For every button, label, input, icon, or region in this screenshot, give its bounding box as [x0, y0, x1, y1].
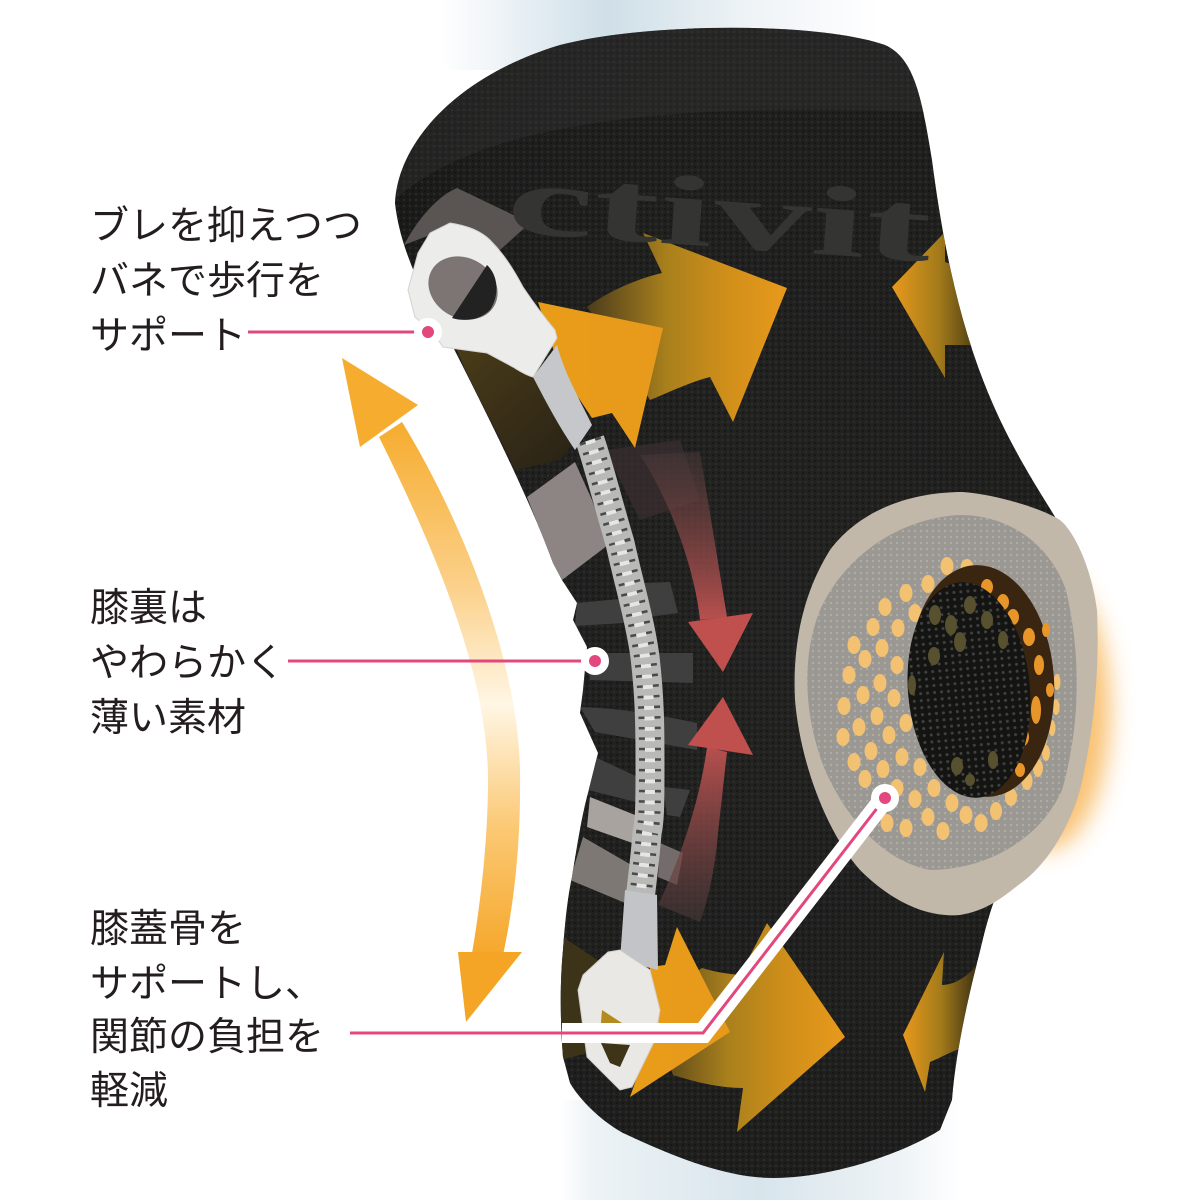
callout: top text: サポート: [90, 315, 246, 358]
lower hinge plate: [578, 950, 660, 1090]
callout: top text: [90, 205, 362, 358]
callout: bottom text: サポートし、: [90, 963, 324, 1006]
upper hinge plate: [408, 223, 557, 377]
orange arrow: upper right: [892, 234, 971, 378]
sleeve top band shading: [395, 23, 940, 200]
pad outer shell: [795, 492, 1098, 915]
motion double arrow: [342, 358, 522, 1022]
red arrow up: [658, 697, 753, 922]
patella pad: [795, 492, 1098, 915]
callout: middle text: 薄い素材: [90, 697, 246, 740]
dark grey stripes: [575, 599, 624, 626]
patella opening: [902, 560, 1062, 802]
orange arrow: upper large: [587, 233, 787, 422]
red arrow down: [640, 452, 753, 672]
knit lettering: ctivit: [503, 143, 935, 284]
pad inner: [807, 515, 1077, 870]
side stay spring: [533, 345, 658, 970]
pad light dots: [836, 557, 1060, 840]
hinge opening: [417, 244, 509, 332]
callout: middle text: [90, 587, 285, 740]
callout: bottom text: 膝蓋骨を: [90, 908, 246, 951]
orange arrow: lower large: [672, 923, 845, 1132]
lower tail olive: [560, 938, 598, 1059]
callout: bottom text: 関節の負担を: [90, 1016, 324, 1059]
upper tail olive: [455, 345, 592, 470]
brown patch near red arrow: [605, 440, 700, 520]
lower sleeve of spring: [620, 890, 658, 970]
callout: top text: バネで歩行を: [90, 260, 324, 303]
mesh spots: [908, 596, 1008, 786]
callout: middle text: 膝裏は: [90, 587, 207, 630]
orange arrow: upper small: [538, 302, 663, 448]
callout: bottom text: [90, 908, 324, 1113]
knee sleeve: [395, 23, 1060, 1178]
light stripes: [587, 797, 635, 843]
orange arrow: lower small: [630, 927, 730, 1097]
orange arrow: lower right: [903, 952, 978, 1092]
patella glow: [980, 570, 1110, 850]
callout: bottom text: 軽減: [90, 1070, 168, 1113]
upper sleeve of spring: [533, 345, 592, 450]
callout line: top: [248, 322, 438, 342]
upper wrap band: [404, 188, 530, 250]
patella mesh: [899, 577, 1039, 803]
callout line: bottom: [350, 788, 895, 1033]
callout: middle text: やわらかく: [90, 642, 285, 685]
opening crescent lights: [981, 579, 1054, 794]
taupe band: [527, 462, 608, 580]
callout: top text: ブレを抑えつつ: [90, 205, 362, 248]
leg background: [440, 0, 960, 1200]
callout line: middle: [288, 651, 605, 671]
